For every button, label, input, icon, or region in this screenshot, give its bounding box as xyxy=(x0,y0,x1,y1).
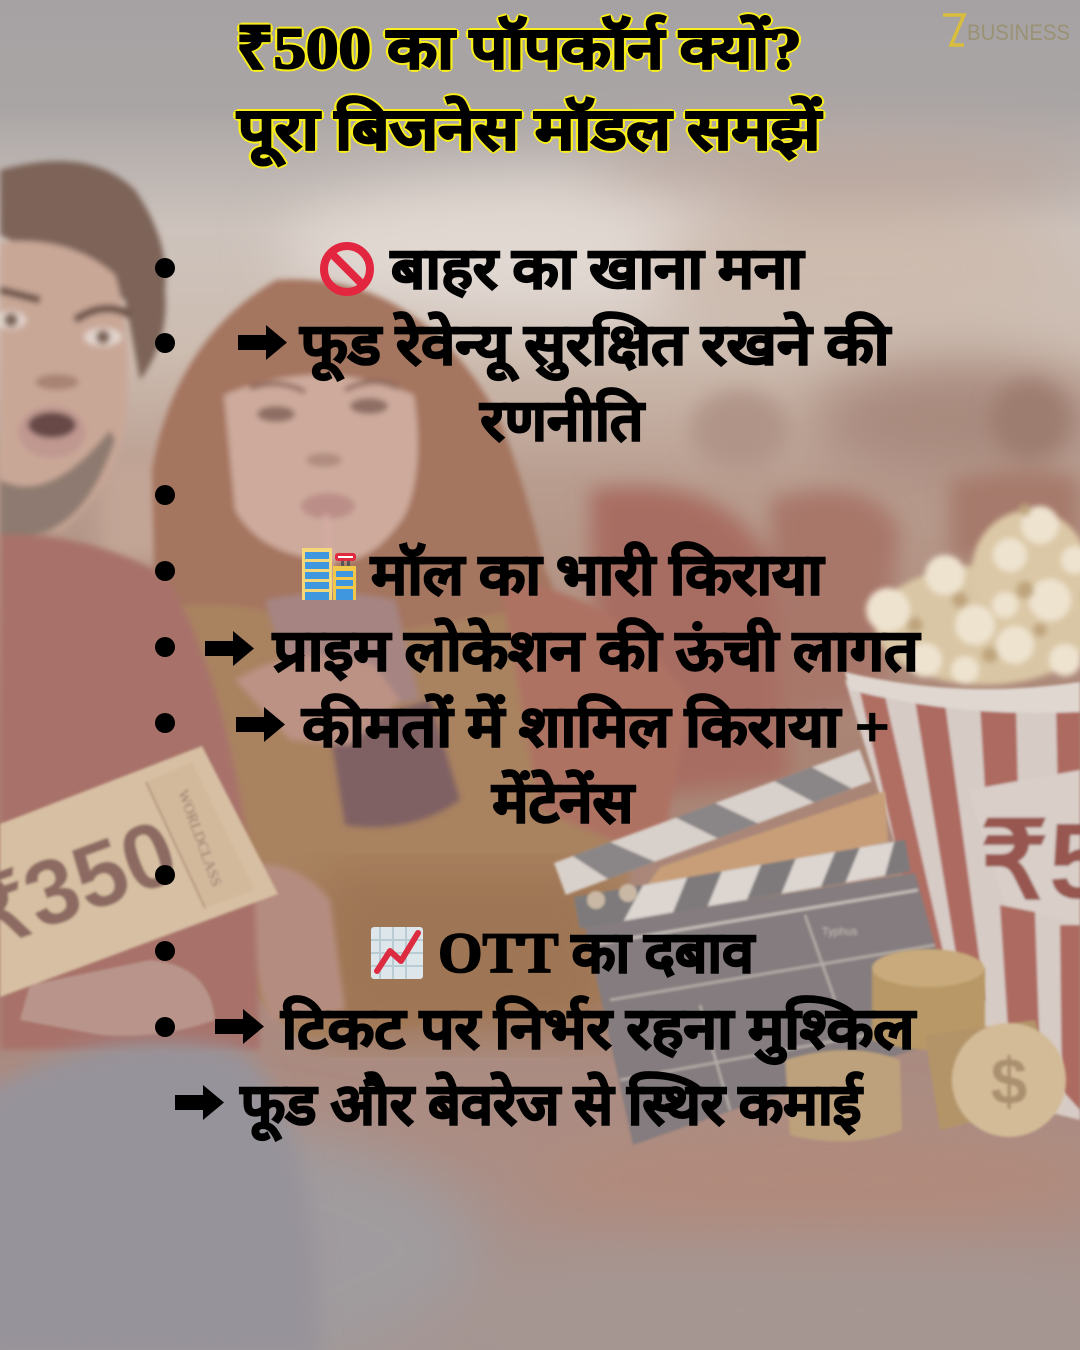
arrow xyxy=(215,1009,264,1044)
line: mall rent: मॉल का भारी किराया xyxy=(371,544,823,607)
man xyxy=(0,161,260,1050)
woman xyxy=(150,279,690,1040)
icon: rising chart xyxy=(371,927,423,979)
line: maintenance: मेंटेनेंस xyxy=(493,772,633,835)
coins: $ xyxy=(991,1044,1027,1118)
jeans xyxy=(0,1041,320,1350)
ticket xyxy=(0,746,278,1036)
title: पूरा बिजनेस मॉडल समझें xyxy=(238,97,820,162)
bullet points xyxy=(155,258,175,1037)
logo: Z Business xyxy=(943,13,1070,47)
title xyxy=(233,12,826,170)
section: outside food banned xyxy=(238,238,892,453)
line: food and beverage: फूड और बेवरेज से स्थिर कमाई xyxy=(241,1074,861,1137)
line: prices include: कीमतों में शामिल किराया + xyxy=(302,696,890,759)
coins xyxy=(785,949,1066,1141)
clapperboard xyxy=(554,749,960,1145)
section: OTT pressure xyxy=(175,922,918,1142)
line: prime location: प्राइम लोकेशन की ऊंची लागत xyxy=(273,620,919,683)
section: mall rent xyxy=(205,541,922,835)
popcorn xyxy=(866,504,1080,685)
arrow xyxy=(238,325,287,360)
line: OTT: OTT का दबाव xyxy=(438,922,754,985)
arrow xyxy=(205,631,254,666)
arrow xyxy=(236,707,285,742)
cup and hands xyxy=(225,592,460,1020)
line: food revenue: फूड रेवेन्यू सुरक्षित रखने की xyxy=(300,314,890,377)
ticket: WORLDCLASS xyxy=(174,788,224,889)
title: ₹500 का पॉपकॉर्न क्यों? xyxy=(236,16,802,81)
line: outside food: बाहर का खाना मना xyxy=(391,238,803,301)
icon: office building xyxy=(302,548,356,600)
line: ticket dependence: टिकट पर निर्भर रहना मुश्किल xyxy=(282,998,914,1061)
seats xyxy=(100,380,1080,800)
icon: prohibited xyxy=(320,242,374,296)
line: strategy: रणनीति xyxy=(481,390,643,453)
arrow xyxy=(175,1085,224,1120)
popcorn bucket xyxy=(845,672,1080,1120)
clapperboard: Typhus xyxy=(822,926,858,938)
